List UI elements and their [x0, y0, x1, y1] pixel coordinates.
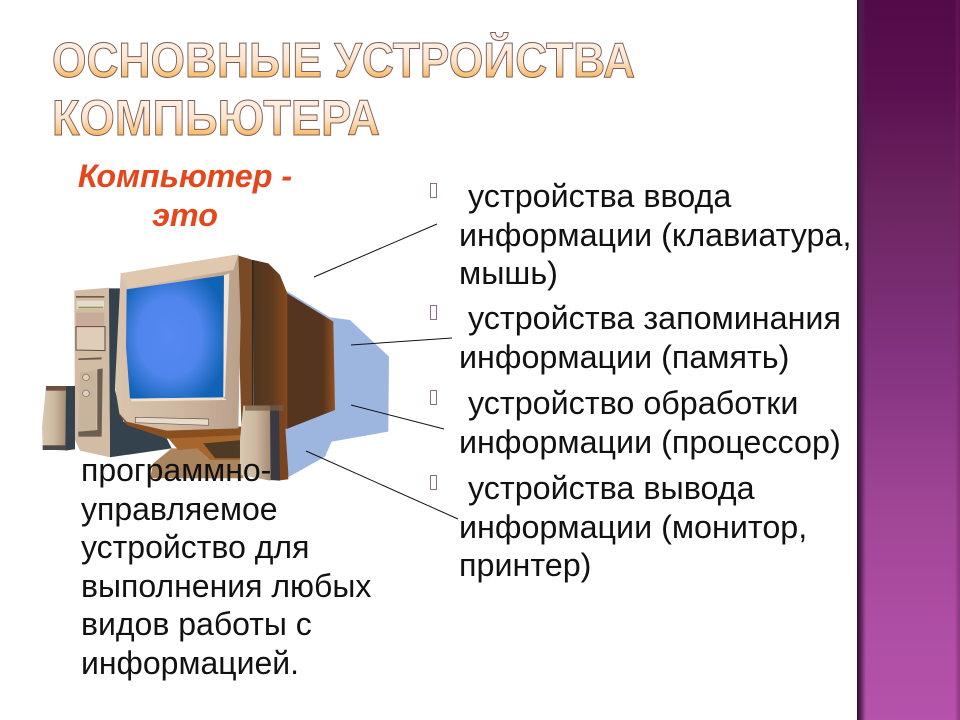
subheading: computer is: это [152, 196, 218, 232]
list item: input devices: устройства ввода [468, 178, 731, 214]
list item: output devices: устройства вывода [468, 470, 755, 506]
tower front [74, 288, 110, 457]
left speaker [65, 386, 75, 451]
text block: computer definition [81, 452, 371, 680]
monitor bezel [115, 254, 241, 431]
right speaker [278, 406, 288, 481]
title: ОСНОВНЫЕ УСТРОЙСТВА [52, 33, 635, 88]
monitor bezel lip [118, 413, 243, 439]
text block: computer definition: выполнения любых [81, 568, 371, 604]
list item: processing device [430, 385, 841, 460]
leader lines [306, 224, 458, 519]
text block: computer definition: информацией. [81, 644, 299, 680]
list item: memory devices: устройства запоминания [468, 300, 841, 336]
subheading: computer is: Компьютер - [78, 158, 292, 194]
list item: memory devices [430, 300, 841, 374]
monitor foot [150, 448, 243, 478]
shadow [283, 290, 389, 477]
list item: input devices: информации (клавиатура, [459, 216, 851, 252]
tower dark side [108, 288, 172, 457]
text block: computer definition: устройство для [81, 529, 309, 565]
title [52, 32, 635, 146]
list item: processing device: устройство обработки [468, 385, 798, 421]
list item: input devices [430, 178, 851, 291]
text block: computer definition: видов работы с [81, 606, 312, 642]
front buttons [135, 417, 209, 425]
list item: output devices [430, 470, 807, 583]
monitor rear [286, 293, 335, 429]
screen [126, 275, 224, 399]
monitor neck [167, 433, 243, 460]
text block: computer definition: программно- [81, 452, 271, 488]
side panel: purple decorative band [857, 0, 960, 720]
list item: output devices: принтер) [459, 547, 591, 583]
list item: memory devices: информации (память) [459, 338, 789, 374]
list item: input devices: мышь) [459, 255, 558, 291]
list item: processing device: информации (процессор) [459, 424, 841, 460]
text block: computer definition: управляемое [81, 490, 278, 526]
list item: output devices: информации (монитор, [459, 508, 807, 544]
subheading: computer is [78, 158, 292, 232]
title: КОМПЬЮТЕРА [52, 90, 380, 146]
